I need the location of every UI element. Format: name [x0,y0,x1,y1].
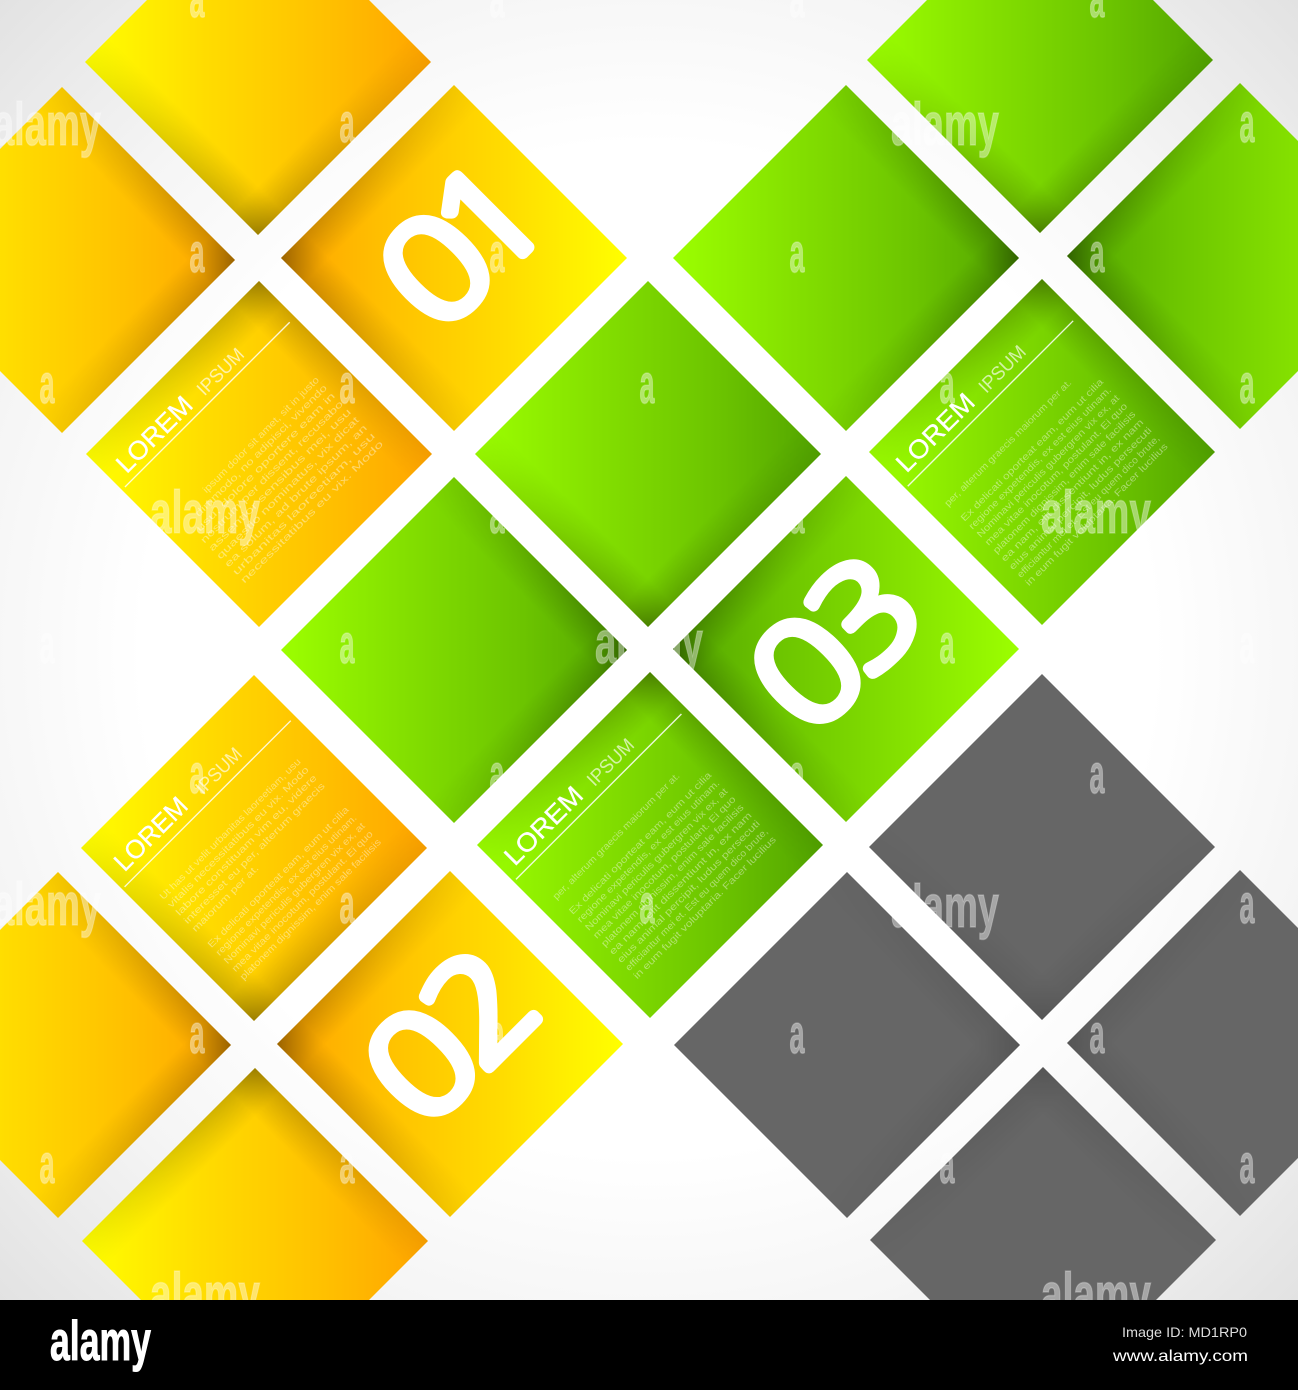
paragraph [551,754,779,982]
watermarks: a [340,872,355,935]
panel: yellow left diamond [0,87,235,433]
paragraph [158,756,384,983]
paragraph: Nominavi periculis gubergren vix ex, at [583,786,731,933]
watermarks: a [640,91,655,154]
heading: lorem ipsum [110,339,250,479]
panel: green left diamond [673,85,1019,431]
rule [124,322,290,487]
watermarks: a [640,872,655,935]
website: www.alamy.com [1112,1348,1248,1365]
paragraph: Ex delicati oporteat eam, eum ut cilia [959,376,1107,524]
watermarks: a [340,91,355,154]
watermarks: alamy [1041,1261,1151,1328]
panel: yellow lower left diamond [0,872,231,1218]
watermarks: a [490,1002,505,1065]
text: a [1240,1132,1255,1195]
paragraph: platonem dignissim, enim sale facilisis [238,837,384,983]
text block: green upper [884,297,1186,599]
footer bar [0,1300,1298,1390]
text block: green lower [492,690,794,992]
paragraph: per, alterum graecis maiorum per at. [551,771,682,902]
watermarks: alamy [891,91,999,158]
watermarks: a [790,482,805,545]
text block: yellow upper [103,300,400,597]
watermarks: a [190,742,205,805]
paragraph: ea nam, elit dissentiunt in, ex nam [607,810,755,957]
text block: yellow lower [100,697,399,995]
rotated text layer [0,0,1187,1192]
text: a [1240,91,1255,154]
watermarks: a [40,612,55,675]
heading: lorem ipsum [890,336,1031,478]
watermarks: a [790,221,805,284]
paragraph: labore constituam vim eu, videre [174,773,319,918]
panel: gray right diamond [1067,870,1298,1216]
watermarks: a [340,612,355,675]
paragraph: Ex delicati oporteat eam, eum ut cilia [206,804,352,950]
rule [124,720,291,887]
watermarks: alamy [150,1261,260,1328]
panel: yellow bottom diamond [82,1068,428,1390]
paragraph: interesset eu per, alterum graecis [182,781,328,926]
paragraph: regione expetendis, ex est eius utinam. [967,385,1114,532]
panel: green text diamond two [477,672,823,1018]
paragraph: quaestio nominatus, vix dicat [215,414,362,562]
heading: lorem ipsum: IPSUM [583,735,639,791]
heading: lorem ipsum: LOREM [107,791,194,877]
heading: lorem ipsum: LOREM [110,390,199,479]
watermarks: a [340,1132,355,1195]
paragraph: platonem dignissim, enim sale facilisis [991,409,1138,556]
paragraph: maiorum per at. [190,863,261,935]
watermarks: a [340,352,355,415]
panel: yellow 01 diamond [281,85,627,431]
watermarks: a [40,1132,55,1195]
panel: yellow text diamond two [81,675,427,1021]
panel: yellow 02 diamond [277,871,623,1217]
heading: lorem ipsum: LOREM [890,387,981,478]
panel: centre top green diamond [475,281,821,627]
panel: centre left green diamond [281,477,627,823]
paragraph: efficiantur mei et. Est eu quem dico brute, [1015,433,1162,580]
heading: lorem ipsum: IPSUM [192,744,247,799]
paragraph: assentior sensibus mei, usu [207,407,354,554]
watermarks: a [40,352,55,415]
paragraph: efficiantur mei et. Est eu quem dico brute, [624,826,771,974]
watermarks: alamy [891,873,999,940]
paragraph: regione expetendis, ex est eius utinam. [575,778,722,925]
paragraph: ea solum, ad brute ipsum, an [223,423,370,570]
paragraph [175,374,386,586]
rule [907,320,1074,487]
watermarks: alamy [150,479,260,546]
number 02: 02 [341,925,564,1149]
paragraph: ea nam, elit dissentiunt in, ex nam [999,417,1146,564]
image id: Image ID: MD1RP0 [1122,1324,1247,1340]
watermarks: a [490,742,505,805]
paragraph: eius animal percipit, ludus persecuti [1007,425,1154,572]
paragraph: eius animal percipit, ludus persecuti [615,818,763,965]
paragraph: nostrum per dissent, recusabo [199,399,346,546]
paragraph: usu, dolore oportere eam in [194,391,338,534]
paragraph: mea vitae inocotum, postulant. Ei quo [230,829,376,975]
panel: green text diamond one [869,279,1215,625]
panel: yellow text diamond one [86,281,432,627]
watermarks: a [640,1132,655,1195]
number 03: 03 [726,533,949,756]
watermarks: a [490,221,505,284]
paragraph: mea vitae inocotum, postulant. Ei quo [591,794,738,941]
panel: green right diamond [1067,83,1298,429]
watermarks: a [790,1002,805,1065]
panel: yellow top diamond [85,0,431,235]
paragraph: in eum fugit voluptaria. Facer lucilius [1023,441,1171,588]
footer logo: alamy [50,1309,151,1372]
heading: lorem ipsum: LOREM [498,780,589,871]
watermarks: a [790,742,805,805]
rule [515,713,682,880]
panel: gray top diamond [869,674,1215,1020]
watermarks: a [490,482,505,545]
heading: lorem ipsum: IPSUM [193,344,249,400]
paragraph: platonem dignissim, enim sale facilisis [599,802,747,949]
paragraph: dimmodo, no adipisci, vivendo [193,383,330,519]
watermarks: a [940,352,955,415]
watermarks: a [640,352,655,415]
panel: green top diamond [867,0,1213,233]
watermarks: a [1090,742,1105,805]
watermarks: alamy [595,609,703,676]
panel: gray left diamond [674,872,1020,1218]
paragraph [943,361,1171,589]
paragraph: Nominavi periculis gubergren vix ex, at [222,821,368,966]
panel: green 03 diamond [673,476,1019,822]
watermarks: a [940,612,955,675]
heading: lorem ipsum [107,738,247,877]
text: a [1240,872,1255,935]
text: a [1240,612,1255,675]
paragraph: regione expetendis, ex est eius utinam. [214,813,359,958]
watermarks: a [190,221,205,284]
paragraph: necessitatibus eu vix. Modo [239,439,386,586]
text: a [1240,352,1255,415]
paragraph: urbanitas laoreetiam, usu [231,431,378,578]
paragraph: mea vitae inocotum, postulant. Ei quo [983,401,1130,548]
paragraph: in eum fugit voluptaria. Facer lucilius [632,834,779,982]
paragraph: Ut has ut velit urbanitas laoreetiam, usu [158,757,303,902]
paragraph: Nominavi periculis gubergren vix ex, at [975,393,1122,540]
heading: lorem ipsum: IPSUM [975,342,1031,398]
paragraph: per, alterum graecis maiorum per at. [943,378,1074,509]
paragraph: vitalis necessitatibus eu vix. Modo [166,765,311,910]
panel: gray bottom diamond [870,1067,1216,1390]
watermarks: alamy [1041,479,1151,546]
number 01: 01 [355,137,571,353]
paragraph: ipsum dolor sit amet, sit in justo [201,375,322,496]
watermarks: a [190,1002,205,1065]
watermarks: a [1090,1002,1105,1065]
paragraph: Ex delicati oporteat eam, eum ut cilia [567,769,715,917]
watermarks: a [1090,221,1105,284]
watermarks: a [940,1132,955,1195]
heading: lorem ipsum [498,729,640,871]
